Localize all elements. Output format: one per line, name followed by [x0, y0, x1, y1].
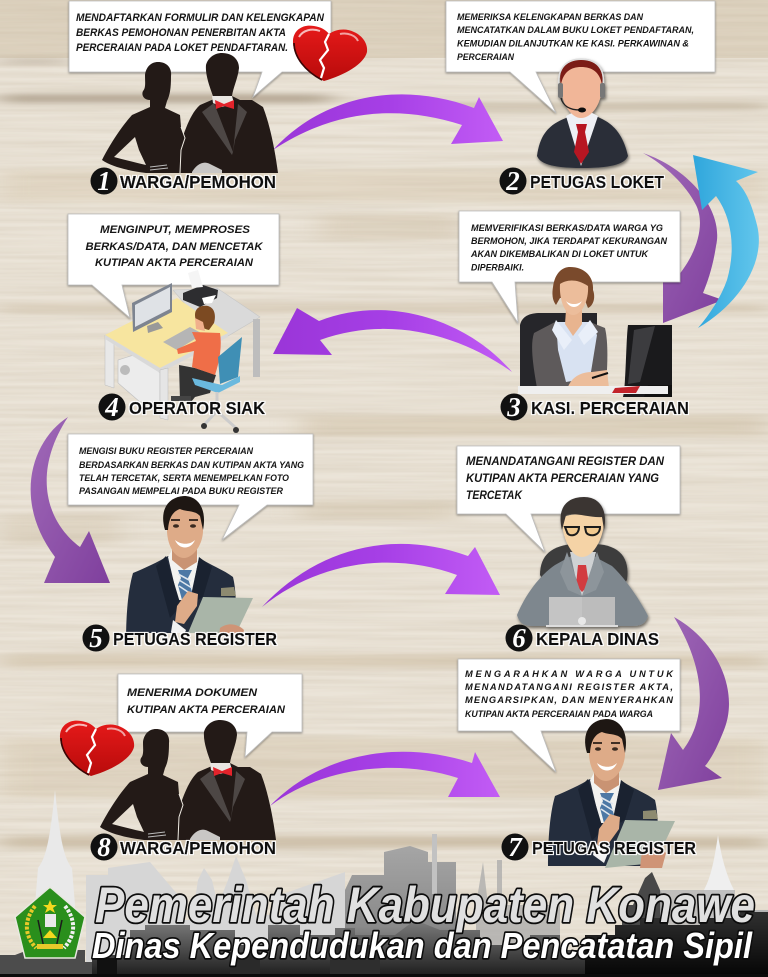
label: operator siak: 4 — [104, 392, 119, 422]
label: warga/pemohon: WARGA/PEMOHON — [120, 172, 276, 192]
arrow: step 5 to step 6 — [262, 544, 500, 607]
text: step 2: MENCATATKAN DALAM BUKU LOKET PENDAFTARAN, — [457, 25, 694, 35]
arrow: blue return — [693, 155, 759, 328]
label: kasi perceraian: KASI. PERCERAIAN — [531, 398, 689, 418]
label: kepala dinas: 6 — [512, 623, 526, 653]
icon: couple silhouette — [100, 720, 276, 840]
label: petugas register: PETUGAS REGISTER — [113, 629, 277, 649]
text: step 7: MENGARAHKAN WARGA UNTUK — [465, 669, 674, 679]
text: step 2: PERCERAIAN — [457, 52, 515, 62]
icon: officer with clipboard — [548, 719, 675, 868]
label: petugas loket: PETUGAS LOKET — [530, 172, 664, 192]
text: step 2 — [457, 12, 694, 62]
icon: broken heart — [293, 26, 367, 81]
panel: step 4 — [68, 214, 279, 433]
text: step 4 — [86, 224, 264, 269]
label: kasi perceraian — [500, 392, 689, 422]
arrow: step 3 to step 4 — [273, 308, 512, 372]
label: operator siak — [98, 392, 265, 422]
speech bubble 1 — [69, 1, 331, 97]
label: kepala dinas: KEPALA DINAS — [536, 629, 659, 649]
text: step 1: BERKAS PEMOHONAN PENERBITAN AKTA — [76, 27, 286, 39]
arrow: step 4 to step 5 — [31, 417, 110, 583]
text: step 4: KUTIPAN AKTA PERCERAIAN — [95, 257, 254, 269]
label: kasi perceraian: 3 — [506, 392, 521, 422]
text: step 1 — [76, 12, 324, 54]
speech bubble 8 — [118, 674, 302, 757]
text: step 4: MENGINPUT, MEMPROSES — [100, 224, 251, 236]
text: step 6: MENANDATANGANI REGISTER DAN — [466, 455, 665, 468]
speech bubble 4 — [68, 214, 279, 318]
label: petugas register — [82, 623, 277, 653]
speech bubble 5 — [68, 434, 313, 540]
icon: head of department with laptop — [517, 497, 648, 627]
text: step 5 — [79, 446, 304, 496]
skyline — [0, 790, 768, 977]
label: petugas loket — [500, 166, 664, 196]
text: step 3: MEMVERIFIKASI BERKAS/DATA WARGA YG — [471, 222, 663, 233]
arrow: step 8 to step 7 — [270, 752, 500, 806]
text: step 2: KEMUDIAN DILANJUTKAN KE KASI. PERKAWINAN & — [457, 38, 689, 48]
text: step 5: MENGISI BUKU REGISTER PERCERAIAN — [79, 446, 253, 456]
text: step 5: PASANGAN MEMPELAI PADA BUKU REGISTER — [79, 486, 283, 496]
logo: Kabupaten Konawe emblem — [15, 887, 85, 958]
text: step 8: MENERIMA DOKUMEN — [127, 687, 258, 699]
speech bubble 6 — [457, 446, 680, 552]
text: step 2: MEMERIKSA KELENGKAPAN BERKAS DAN — [457, 12, 644, 22]
label: warga/pemohon: 1 — [97, 166, 111, 196]
label: petugas loket: 2 — [505, 166, 520, 196]
text: step 1: PERCERAIAN PADA LOKET PENDAFTARAN. — [76, 42, 288, 54]
icon: couple silhouette — [102, 53, 278, 173]
panel: step 7 — [458, 659, 696, 868]
text: step 7 — [465, 669, 674, 719]
panel: step 8 — [60, 674, 302, 862]
label: operator siak: OPERATOR SIAK — [129, 398, 265, 418]
text: step 3 — [470, 222, 667, 272]
text: step 5: TELAH TERCETAK, SERTA MENEMPELKAN FOTO — [79, 473, 290, 483]
label: petugas register: 7 — [508, 832, 523, 862]
label: kepala dinas — [506, 623, 659, 653]
text: step 7: KUTIPAN AKTA PERCERAIAN PADA WARGA — [465, 709, 653, 719]
text: step 6 — [466, 455, 665, 502]
icon: operator at desk — [105, 270, 260, 433]
label: warga/pemohon: 8 — [97, 832, 111, 862]
text: step 8 — [127, 687, 286, 716]
panel: step 3 — [459, 211, 689, 422]
text: step 4: BERKAS/DATA, DAN MENCETAK — [86, 241, 264, 253]
label: warga/pemohon: WARGA/PEMOHON — [120, 838, 276, 858]
panel: step 6 — [457, 446, 680, 653]
text: step 8: KUTIPAN AKTA PERCERAIAN — [127, 704, 286, 716]
icon: woman at desk with monitor — [518, 267, 672, 397]
arrow: step 2 to step 3 — [643, 153, 723, 323]
panel: step 5 — [68, 434, 313, 653]
speech bubble 2 — [446, 1, 715, 113]
speech bubble 3 — [459, 211, 680, 323]
arrow: step 6 to step 7 — [658, 617, 729, 790]
text: step 5: BERDASARKAN BERKAS DAN KUTIPAN AKTA YANG — [79, 460, 304, 470]
text: step 3: AKAN DIKEMBALIKAN DI LOKET UNTUK — [470, 248, 649, 259]
speech bubble 7 — [458, 659, 680, 772]
panel: step 1 — [69, 1, 367, 196]
text: step 6: TERCETAK — [466, 489, 523, 502]
panel: step 2 — [446, 1, 715, 196]
icon: officer with clipboard — [126, 496, 253, 645]
label: petugas register — [502, 832, 696, 862]
text: step 6: KUTIPAN AKTA PERCERAIAN YANG — [466, 472, 659, 485]
text: step 3: BERMOHON, JIKA TERDAPAT KEKURANGAN — [471, 235, 667, 246]
text: step 7: MENANDATANGANI REGISTER AKTA, — [465, 682, 673, 692]
text: step 1: MENDAFTARKAN FORMULIR DAN KELENGKAPAN — [76, 12, 324, 24]
arrow: step 1 to step 2 — [273, 94, 503, 150]
label: petugas register: PETUGAS REGISTER — [532, 838, 696, 858]
text: step 3: DIPERBAIKI. — [471, 262, 524, 272]
label: petugas register: 5 — [89, 623, 103, 653]
text: step 7: MENGARSIPKAN, DAN MENYERAHKAN — [465, 695, 673, 705]
label: warga/pemohon — [90, 166, 276, 196]
icon: loket officer with headset — [537, 59, 628, 168]
label: warga/pemohon — [90, 832, 276, 862]
icon: broken heart — [60, 721, 134, 776]
